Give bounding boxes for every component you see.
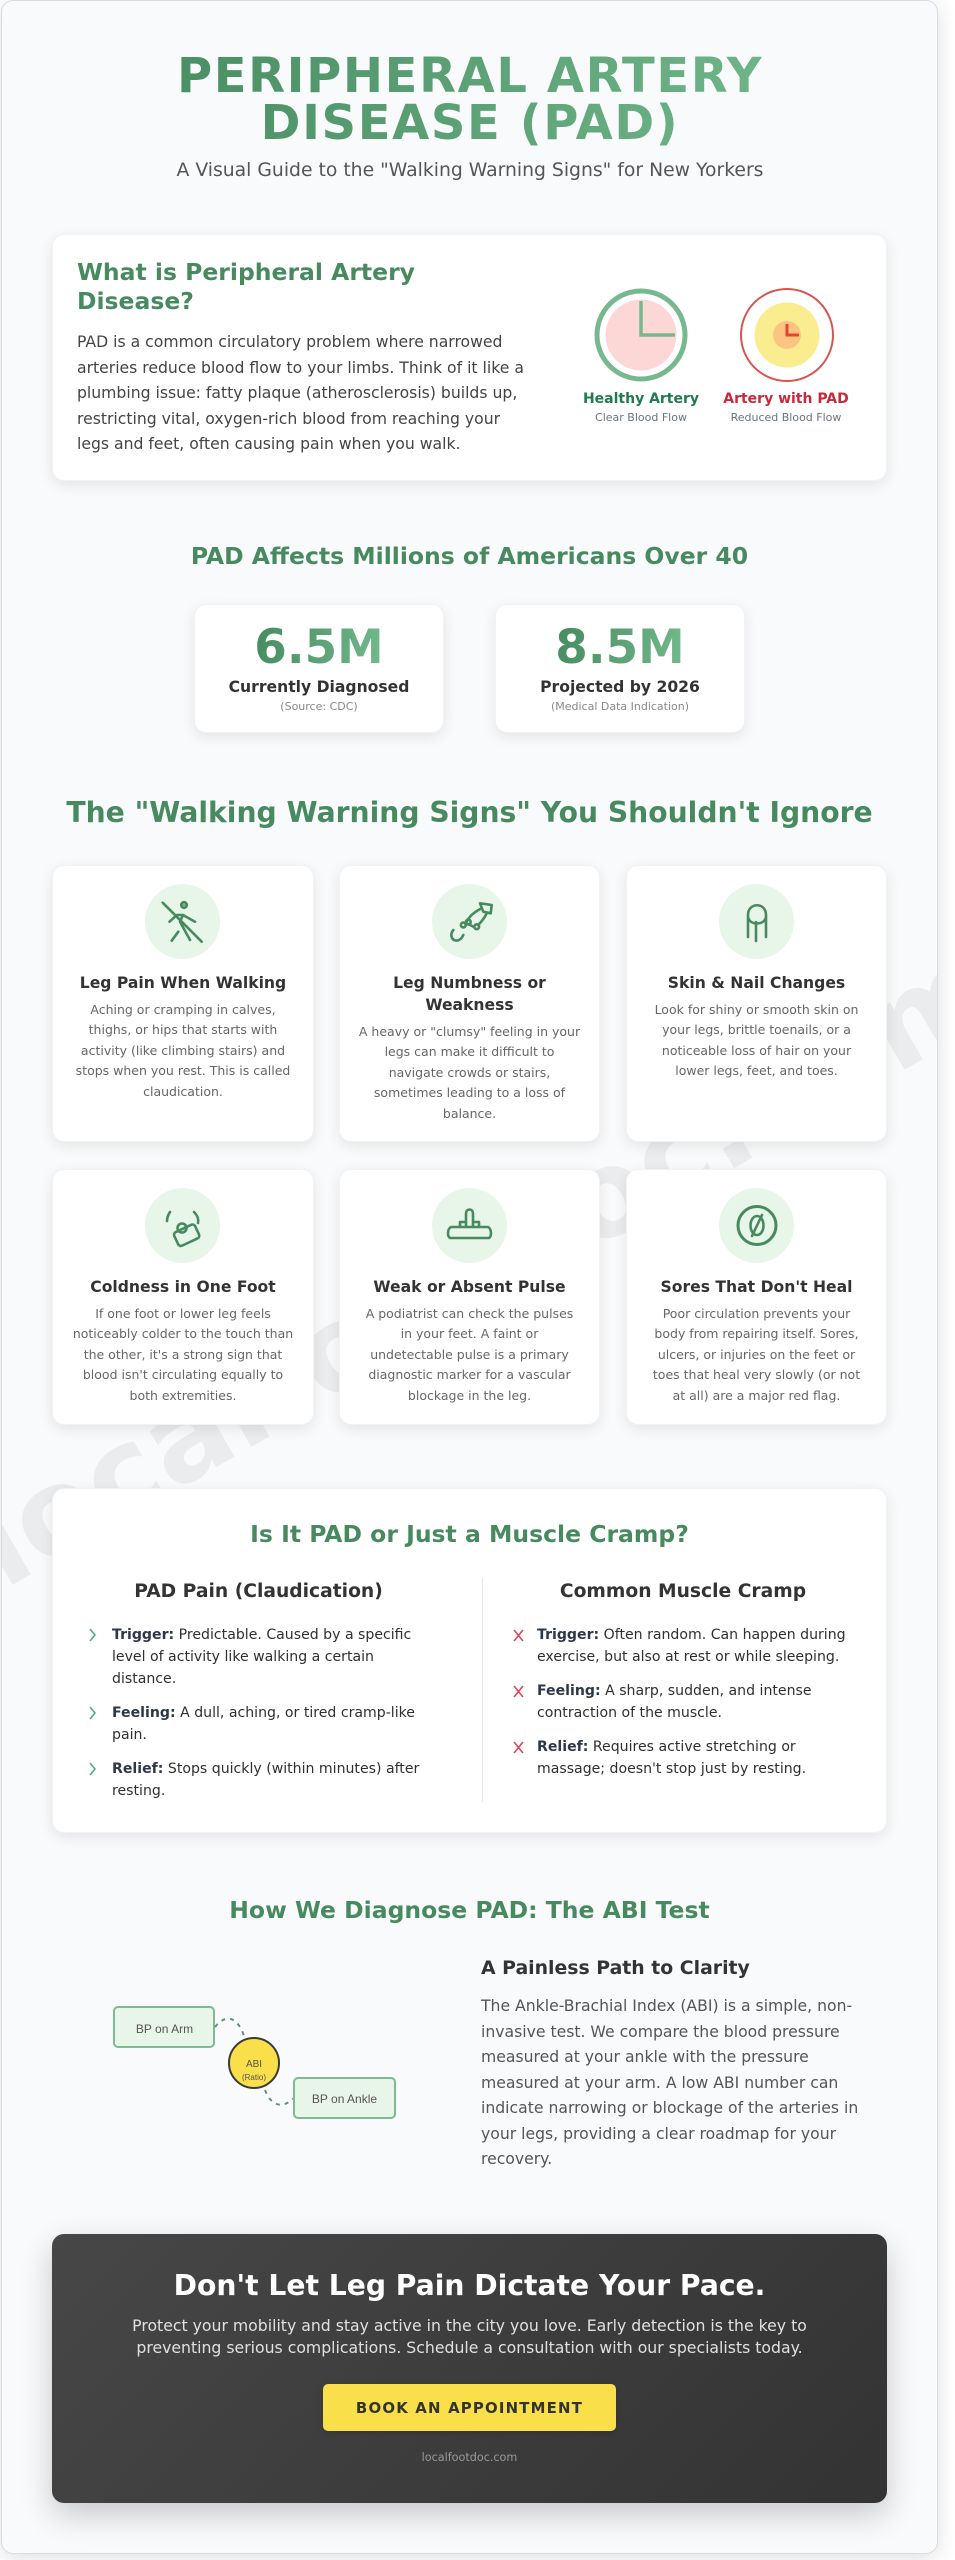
card title: Weakness: [425, 996, 514, 1014]
card text: at all) are a major red flag.: [673, 1388, 840, 1403]
list item: [537, 1739, 806, 1777]
card text: toes that heal very slowly (or not: [653, 1367, 860, 1382]
card text: both extremities.: [130, 1388, 236, 1403]
card: skin and nail: [626, 865, 887, 1142]
heading: painless path: A Painless Path to Clarity: [481, 1958, 750, 1979]
list: muscle cramp: [537, 1627, 846, 1665]
body text: PAD is a common circulatory problem where narrowed: [77, 332, 502, 351]
stat label: Projected by 2026: [540, 678, 700, 696]
card text: noticeable loss of hair on your: [662, 1043, 851, 1058]
card title: [393, 974, 546, 1014]
card title: Weak or Absent Pulse: [373, 1278, 566, 1296]
card: pulse: [339, 1169, 600, 1425]
card title: Coldness in One Foot: [90, 1278, 276, 1296]
heading: [77, 258, 415, 314]
card text: noticeably colder to the touch than: [73, 1326, 293, 1341]
card text: [76, 1002, 290, 1099]
list: muscle cramp: Trigger: Often random. Can happen during: [537, 1627, 846, 1643]
CTA text: preventing serious complications. Schedule a consultation with our specialists today.: [136, 2338, 803, 2357]
list: PAD pain: level of activity like walking a certain: [112, 1649, 374, 1665]
body text: plumbing issue: fatty plaque (atherosclerosis) builds up,: [77, 383, 517, 402]
icon: numbness: [432, 884, 507, 959]
heading: Disease?: [77, 286, 194, 314]
CTA text: [132, 2316, 807, 2357]
list item: [112, 1705, 415, 1743]
list item: [537, 1683, 812, 1721]
heading: What is Peripheral Artery: [77, 258, 415, 286]
caption: clear blood flow: Clear Blood Flow: [595, 411, 687, 424]
card title: Leg Pain When Walking: [80, 974, 286, 992]
card text: body from repairing itself. Sores,: [654, 1326, 859, 1341]
card text: Look for shiny or smooth skin on: [655, 1002, 858, 1017]
card text: blood isn't circulating equally to: [83, 1367, 283, 1382]
card title: Leg Numbness or: [393, 974, 546, 992]
list item: Relief: Requires active stretching or: [537, 1739, 796, 1755]
title: DISEASE (PAD): [261, 95, 679, 151]
card title: Sores That Don't Heal: [660, 1278, 852, 1296]
list item: [112, 1761, 420, 1799]
card text: legs can make it difficult to: [385, 1044, 554, 1059]
card: leg pain: [52, 865, 314, 1142]
icon: artery with PAD: [740, 288, 834, 382]
body text: [77, 332, 524, 453]
text: ABI description: measured at your ankle with the pressure: [481, 2047, 809, 2066]
arm box: BP on Arm: [136, 2022, 193, 2036]
label: healthy artery: Healthy Artery: [583, 391, 699, 407]
dashed connector bottom: [265, 2090, 294, 2105]
icon: leg pain: [145, 884, 220, 959]
title: PERIPHERAL ARTERY: [177, 48, 763, 104]
heading: Is It PAD or Just a Muscle Cramp?: [250, 1520, 689, 1548]
list item: massage; doesn't stop just by resting.: [537, 1761, 806, 1777]
card text: If one foot or lower leg feels: [95, 1306, 271, 1321]
CTA heading: Don't Let Leg Pain Dictate Your Pace.: [174, 2269, 765, 2302]
card text: [655, 1002, 858, 1078]
column heading: PAD pain: PAD Pain (Claudication): [134, 1581, 383, 1602]
stat label: Currently Diagnosed: [229, 678, 409, 696]
list item: contraction of the muscle.: [537, 1705, 722, 1721]
list: PAD pain: [112, 1627, 411, 1687]
card text: thighs, or hips that starts with: [89, 1022, 277, 1037]
list item: Feeling: A sharp, sudden, and intense: [537, 1683, 812, 1699]
stat card: 6.5M: [194, 604, 444, 733]
heading: warning signs: The "Walking Warning Signs" You Shouldn't Ignore: [66, 796, 873, 829]
ABI circle: [229, 2038, 279, 2088]
stat source: (Medical Data Indication): [551, 700, 689, 713]
card text: A heavy or "clumsy" feeling in your: [359, 1024, 580, 1039]
card text: [73, 1306, 293, 1403]
card text: lower legs, feet, and toes.: [675, 1063, 838, 1078]
icon: coldness: [145, 1188, 220, 1263]
card text: your legs, brittle toenails, or a: [662, 1022, 851, 1037]
dashed connector top: [215, 2019, 245, 2039]
ankle box: [294, 2078, 395, 2118]
diagram: ABI: [113, 2006, 396, 2119]
card text: [653, 1306, 860, 1403]
divider: [482, 1578, 483, 1802]
card text: in your feet. A faint or: [401, 1326, 538, 1341]
stat source: (Source: CDC): [280, 700, 358, 713]
CTA button: BOOK AN APPOINTMENT: [356, 2399, 583, 2417]
body text: legs and feet, often causing pain when you walk.: [77, 434, 461, 453]
list item: Feeling: A dull, aching, or tired cramp-like: [112, 1705, 415, 1721]
icons: list markers: [90, 1628, 524, 1776]
text: ABI description: [480, 1996, 858, 2168]
text: ABI description: indicate narrowing or blockage of the arteries in: [481, 2098, 858, 2117]
panel: comparison: [52, 1488, 887, 1833]
card text: [359, 1024, 580, 1121]
stat number: 8.5M: [555, 621, 685, 675]
CTA text: Protect your mobility and stay active in the city you love. Early detection is the key to: [132, 2316, 807, 2335]
list item: resting.: [112, 1783, 165, 1799]
text: ABI description: The Ankle-Brachial Index (ABI) is a simple, non-: [481, 1996, 852, 2015]
card text: Poor circulation prevents your: [663, 1306, 850, 1321]
title: [100, 53, 840, 147]
list: PAD pain: Trigger: Predictable. Caused by a specific: [112, 1627, 411, 1643]
heading: ABI: How We Diagnose PAD: The ABI Test: [229, 1896, 710, 1924]
card: numbness: [339, 865, 600, 1142]
body text: restricting vital, oxygen-rich blood from reaching your: [77, 408, 500, 428]
label: artery with PAD: Artery with PAD: [723, 391, 849, 407]
list item: Relief: Stops quickly (within minutes) after: [112, 1761, 419, 1777]
icon: sores: [719, 1188, 794, 1263]
card text: claudication.: [143, 1084, 223, 1099]
card text: navigate crowds or stairs,: [389, 1065, 550, 1080]
list: muscle cramp: exercise, but also at rest or while sleeping.: [537, 1649, 839, 1665]
ABI circle: (Ratio): [242, 2073, 266, 2082]
CTA button: [323, 2384, 616, 2431]
card text: sometimes leading to a loss of: [374, 1085, 565, 1100]
ABI circle: ABI: [246, 2059, 262, 2070]
card text: ulcers, or injuries on the feet or: [658, 1347, 855, 1362]
card title: Skin & Nail Changes: [668, 974, 845, 992]
card: coldness: [52, 1169, 314, 1425]
card text: A podiatrist can check the pulses: [366, 1306, 573, 1321]
list: PAD pain: distance.: [112, 1671, 176, 1687]
text: ABI description: recovery.: [481, 2149, 552, 2168]
list item: pain.: [112, 1727, 147, 1743]
caption: reduced blood flow: Reduced Blood Flow: [731, 411, 841, 424]
heading: stats: PAD Affects Millions of Americans Over 40: [191, 542, 748, 570]
icon: pulse: [432, 1188, 507, 1263]
card text: blockage in the leg.: [408, 1388, 531, 1403]
card text: diagnostic marker for a vascular: [368, 1367, 571, 1382]
body text: arteries reduce blood flow to your limbs. Think of it like a: [77, 358, 524, 376]
ankle box: BP on Ankle: [312, 2092, 377, 2106]
icon: skin and nail: [719, 884, 794, 959]
text: ABI description: your legs, providing a clear roadmap for your: [481, 2124, 836, 2142]
card text: balance.: [443, 1106, 496, 1121]
text: ABI description: measured at your arm. A low ABI number can: [481, 2072, 838, 2092]
card: sores: [626, 1169, 887, 1425]
card text: Aching or cramping in calves,: [90, 1002, 276, 1017]
panel: what is PAD: [52, 234, 887, 481]
card text: activity (like climbing stairs) and: [81, 1043, 285, 1058]
card text: stops when you rest. This is called: [76, 1063, 290, 1078]
arm box: [114, 2007, 214, 2047]
panel: call to action: [52, 2234, 887, 2503]
stat number: 6.5M: [254, 621, 384, 675]
text: ABI description: invasive test. We compare the blood pressure: [481, 2022, 840, 2040]
column heading: muscle cramp: Common Muscle Cramp: [560, 1581, 806, 1602]
subtitle: A Visual Guide to the "Walking Warning Signs" for New Yorkers: [177, 160, 763, 181]
website: localfootdoc.com: [422, 2451, 517, 2464]
card text: the other, it's a strong sign that: [84, 1347, 282, 1362]
stat card: 8.5M: [495, 604, 745, 733]
icon: healthy artery: [594, 288, 688, 382]
card text: undetectable pulse is a primary: [370, 1347, 569, 1362]
card text: [366, 1306, 573, 1403]
